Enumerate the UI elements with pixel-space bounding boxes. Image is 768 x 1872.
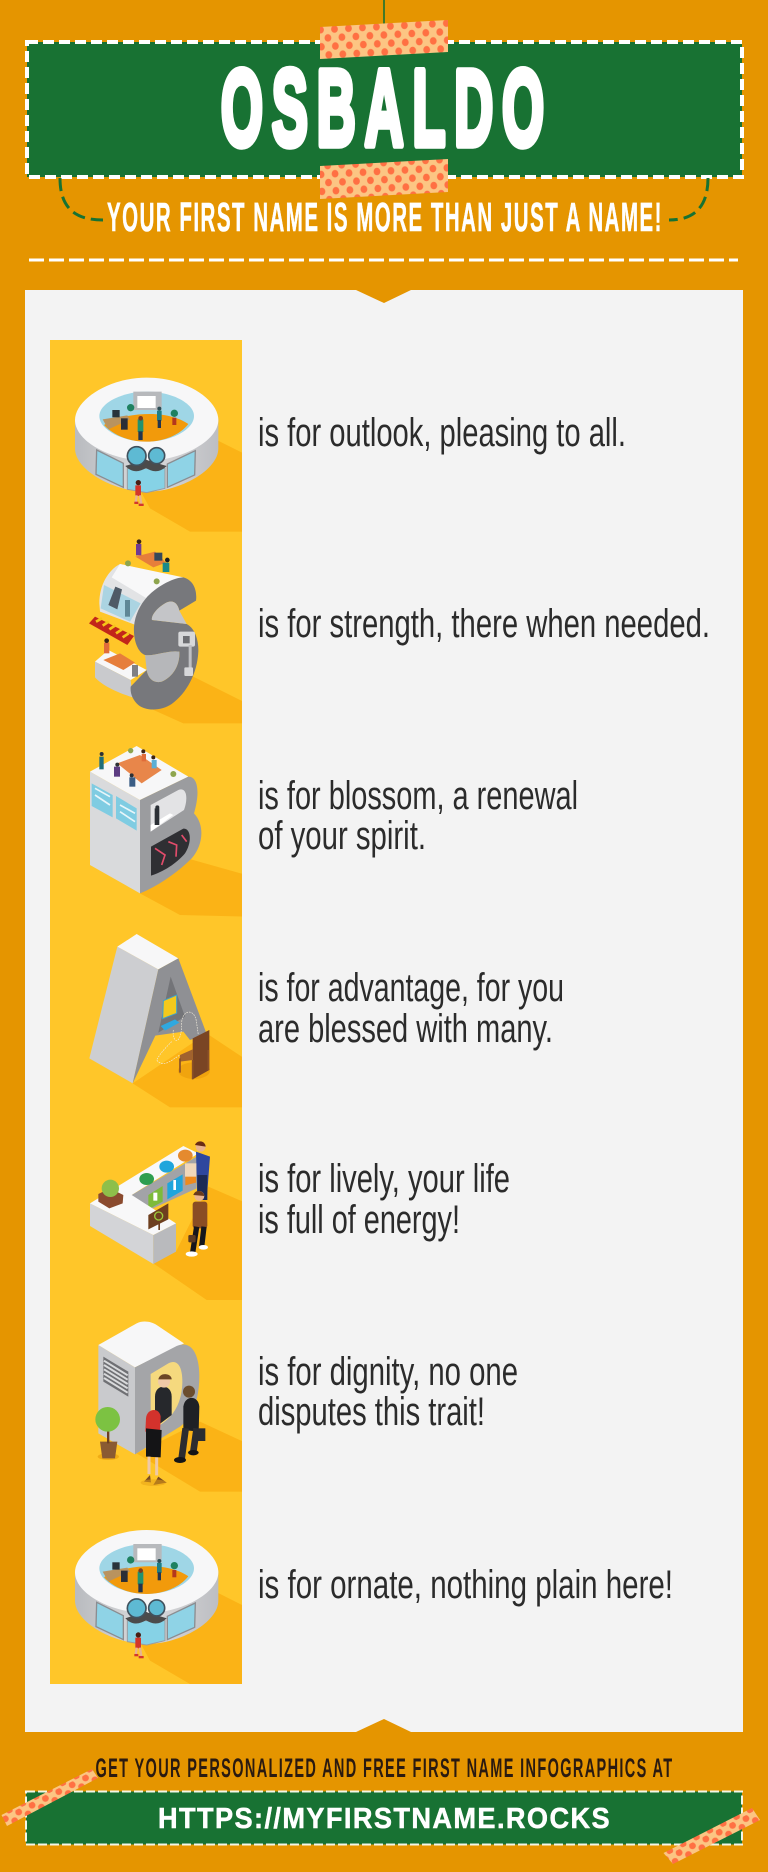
text: B: of your spirit. (258, 814, 426, 858)
curved connector left (60, 178, 103, 220)
text: L: is full of energy! (258, 1198, 460, 1242)
panel: yellow strip (50, 340, 242, 1684)
tape: footer left (2, 1769, 98, 1826)
text: A (258, 966, 564, 1051)
text: O: is for outlook, pleasing to all. (258, 411, 626, 455)
panel: main paper (25, 290, 743, 1732)
tape: footer right (664, 1808, 760, 1864)
footer url: HTTPS://MYFIRSTNAME.ROCKS (158, 1803, 611, 1835)
text: B (258, 774, 578, 858)
icon: letter O (75, 378, 247, 532)
text: L (258, 1157, 510, 1242)
icon: letter L (90, 1141, 247, 1300)
curved connector right (669, 178, 708, 220)
tape: bottom (320, 159, 448, 199)
title banner (27, 42, 742, 177)
text: A: are blessed with many. (258, 1007, 553, 1051)
text: A: is for advantage, for you (258, 966, 564, 1010)
icon: letter D (95, 1322, 247, 1492)
text: L: is for lively, your life (258, 1157, 510, 1201)
icons wrapper (75, 378, 247, 1684)
text: B: is for blossom, a renewal (258, 774, 578, 818)
text: D: is for dignity, no one (258, 1350, 518, 1394)
text: D: disputes this trait! (258, 1390, 485, 1434)
text: D (258, 1350, 518, 1434)
icon: letter O repeated (75, 1530, 247, 1684)
icon: letter B (90, 746, 247, 917)
icon: letter S (89, 539, 247, 723)
tape: top (320, 20, 448, 59)
footer banner (26, 1792, 742, 1844)
hanging line (383, 0, 385, 24)
icon: letter A (89, 934, 247, 1107)
